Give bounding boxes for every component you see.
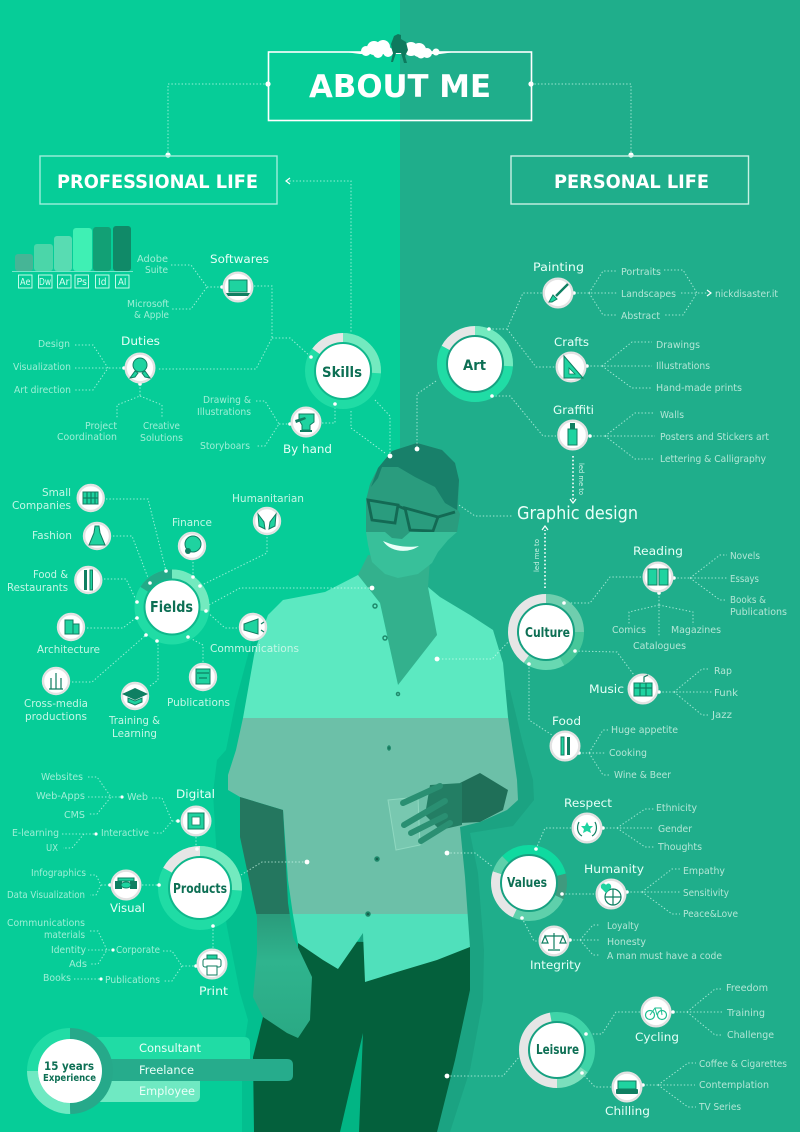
panel: skills: Art direction [14, 385, 71, 396]
shirt [228, 575, 518, 982]
panel: culture [513, 544, 787, 781]
bar chart: software skills: Ps [76, 277, 87, 288]
panel: products: materials [44, 930, 85, 941]
icon: training [122, 683, 148, 709]
panel: fields [7, 485, 304, 740]
panel: culture: Jazz [711, 710, 732, 721]
icon: architecture [58, 614, 84, 640]
panel: fields: Companies [12, 499, 71, 512]
panel: culture: Music [589, 682, 624, 696]
panel: fields: Training & [108, 714, 160, 727]
ring: skills [310, 338, 376, 404]
panel: products: E-learning [12, 828, 59, 839]
heading: personal life [511, 156, 748, 204]
panel: art: Drawings [656, 340, 700, 351]
panel: art: Illustrations [656, 361, 710, 372]
bar: employee: Employee [139, 1084, 195, 1098]
panel: values: Sensitivity [683, 888, 729, 899]
panel: skills: Visualization [13, 362, 71, 373]
panel: products [7, 772, 236, 998]
ring: art [442, 331, 508, 397]
panel: art: Painting [533, 260, 584, 274]
panel: culture: Rap [714, 666, 732, 677]
panel: culture: Books & [730, 595, 766, 606]
panel: art: Art [463, 358, 486, 374]
icon: publications [190, 664, 216, 690]
panel: skills: Illustrations [197, 407, 251, 418]
panel: products: Communications [7, 918, 85, 929]
panel: products: Products [173, 882, 227, 897]
panel: skills: Solutions [140, 433, 183, 444]
bar chart: software skills [12, 226, 133, 288]
icon: softwares [224, 273, 252, 301]
bar chart: software skills: Ae [20, 277, 31, 288]
face upper band [366, 443, 460, 532]
right forearm [460, 773, 508, 823]
panel: culture: Culture [525, 626, 570, 641]
icon: food [551, 732, 579, 760]
panel: products: Infographics [31, 868, 86, 879]
panel: art: Posters and Stickers art [660, 432, 769, 443]
panel: experience: 15 years [44, 1059, 94, 1073]
label: led me to, lower: led me to [533, 539, 541, 572]
title: ABOUT ME [309, 69, 491, 105]
ring: fields [140, 574, 204, 640]
panel: culture: Huge appetite [611, 725, 678, 736]
panel: art: Portraits [621, 267, 661, 278]
background right panel [400, 0, 800, 1132]
panel: skills: Project [85, 421, 117, 432]
panel: values: Honesty [607, 937, 646, 948]
panel: values: Humanity [584, 862, 644, 876]
trousers [253, 940, 470, 1132]
panel: products: Data Visualization [7, 890, 85, 901]
panel: skills: & Apple [134, 310, 169, 321]
panel: skills: Storyboars [200, 441, 250, 452]
panel: products: Ads [69, 959, 87, 970]
panel: leisure: Challenge [727, 1030, 774, 1041]
panel: culture: Essays [730, 574, 759, 585]
panel: products: Print [199, 984, 228, 998]
panel: culture: Cooking [609, 748, 647, 759]
icon: cycling [642, 998, 670, 1026]
bar chart: software skills: Id [98, 277, 106, 288]
hair [371, 443, 459, 510]
panel: fields: Humanitarian [232, 492, 304, 505]
smile [383, 541, 419, 551]
panel: values: Peace&Love [683, 909, 738, 920]
neck and chest [358, 555, 437, 685]
panel: culture: Wine & Beer [614, 770, 671, 781]
panel: fields: Learning [112, 727, 157, 740]
panel: culture: Catalogues [633, 641, 686, 652]
panel: skills: Skills [322, 365, 362, 381]
panel: skills: Drawing & [203, 395, 251, 406]
panel: culture: Reading [633, 544, 683, 558]
bar chart: software skills: AI [118, 277, 126, 288]
panel: art: Landscapes [621, 289, 676, 300]
panel: culture: Funk [714, 688, 738, 699]
icon: painting [544, 279, 572, 307]
heading: personal life: PERSONAL LIFE [554, 172, 709, 193]
panel: products: Websites [41, 772, 83, 783]
icon: duties [126, 354, 154, 382]
panel: values: Integrity [530, 958, 581, 972]
panel: skills: Design [38, 339, 70, 350]
icon: fashion [84, 523, 110, 549]
panel: values: Ethnicity [656, 803, 697, 814]
bar: employee [90, 1081, 200, 1102]
panel: skills [13, 252, 376, 456]
left arm [240, 797, 312, 1038]
ring: leisure [524, 1017, 590, 1083]
panel: leisure: Cycling [635, 1030, 679, 1044]
bar: freelance [90, 1059, 293, 1081]
panel: leisure: Leisure [536, 1043, 579, 1058]
illustration: man on cloud [345, 34, 455, 63]
panel: fields: Fashion [32, 529, 72, 542]
panel: skills: Coordination [57, 432, 117, 443]
nose shadow [385, 532, 410, 539]
panel: fields: Restaurants [7, 581, 68, 594]
panel: art: Walls [660, 410, 684, 421]
panel: culture: Food [552, 714, 581, 728]
icon: integrity [540, 927, 568, 955]
panel: products: Digital [176, 787, 215, 801]
panel: skills: Microsoft [127, 299, 169, 310]
icon: cross-media [43, 668, 69, 694]
bar: consultant: Consultant [139, 1041, 201, 1055]
icon: digital [182, 807, 210, 835]
icon: food [75, 567, 101, 593]
panel: culture: Publications [730, 607, 787, 618]
panel: leisure: Freedom [726, 983, 768, 994]
panel: fields: Fields [150, 598, 193, 616]
panel: art [442, 260, 778, 465]
panel: culture: Comics [612, 625, 646, 636]
gap between legs [340, 1033, 363, 1132]
panel: values: Respect [564, 796, 612, 810]
bar chart: software skills: Ar [59, 277, 70, 288]
icon: music [629, 675, 657, 703]
panel: experience: Experience [43, 1073, 96, 1084]
ring: products [164, 852, 236, 924]
icon: small companies [78, 485, 104, 511]
bar: freelance: Freelance [139, 1063, 194, 1077]
connector lines [62, 84, 727, 1107]
lower face [366, 532, 457, 578]
panel: products: UX [46, 843, 58, 854]
icon: by hand [292, 408, 320, 436]
panel: values: Gender [658, 824, 692, 835]
panel: fields: Small [42, 486, 71, 499]
panel: fields: productions [25, 710, 87, 723]
panel: fields: Food & [33, 568, 68, 581]
panel: art: Lettering & Calligraphy [660, 454, 766, 465]
panel: leisure: Training [726, 1008, 765, 1019]
panel: products: Web [127, 792, 148, 803]
panel: leisure: Chilling [605, 1104, 650, 1118]
panel: fields: Architecture [37, 643, 100, 656]
panel: products: Corporate [116, 945, 160, 956]
panel: skills: Duties [121, 334, 160, 348]
icon: humanity [597, 880, 625, 908]
icon: chilling [613, 1073, 641, 1101]
panel: art: nickdisaster.it [715, 289, 778, 300]
panel: products: Books [43, 973, 71, 984]
right hand [403, 783, 462, 841]
icon: print [198, 950, 226, 978]
panel: culture: Magazines [671, 625, 721, 636]
icon: reading [644, 563, 672, 591]
panel: products: Interactive [101, 828, 149, 839]
icon: visual [112, 871, 140, 899]
ring: values [496, 850, 562, 916]
connector dots [94, 81, 676, 1087]
icon: communications [240, 614, 266, 640]
panel: values: Empathy [683, 866, 725, 877]
bar chart: software skills: Dw [39, 277, 51, 288]
person silhouette shadow right [360, 690, 534, 1132]
panel: values: Thoughts [657, 842, 702, 853]
panel: culture: Novels [730, 551, 760, 562]
portrait of the man [228, 443, 518, 1132]
panel: fields: Cross-media [24, 697, 88, 710]
panel: values: Values [507, 876, 547, 891]
shirt buttons [366, 604, 400, 916]
panel: art: Abstract [621, 311, 660, 322]
glasses [368, 500, 455, 531]
icon: humanitarian [254, 508, 280, 534]
panel: experience [32, 1034, 293, 1108]
ring: culture [513, 599, 579, 665]
man silhouette [391, 34, 408, 63]
panel: fields: Publications [167, 696, 230, 709]
panel: products: Web-Apps [36, 791, 85, 802]
background left panel [0, 0, 400, 1132]
panel: products: CMS [64, 810, 85, 821]
panel: leisure [524, 983, 787, 1118]
icon: graffiti [558, 421, 587, 449]
panel: art: Hand-made prints [656, 383, 742, 394]
cloud [345, 40, 455, 58]
ring: 15 years [32, 1034, 108, 1108]
panel: leisure: Contemplation [699, 1080, 769, 1091]
panel: skills: Suite [145, 265, 168, 276]
label: led me to, upper: led me to [577, 463, 585, 495]
icon: crafts [557, 353, 585, 381]
panel: values: Loyalty [607, 921, 639, 932]
bar: consultant [90, 1037, 250, 1059]
panel: skills: Adobe [137, 254, 168, 265]
panel: products: Publications [105, 975, 160, 986]
panel: leisure: TV Series [698, 1102, 741, 1113]
panel: values [496, 796, 738, 972]
panel: skills: Creative [143, 421, 180, 432]
panel: art: Crafts [554, 335, 589, 349]
panel: leisure: Coffee & Cigarettes [699, 1059, 787, 1070]
panel: skills: By hand [283, 442, 332, 456]
label: graphic design: Graphic design [517, 504, 638, 524]
glass [388, 797, 420, 850]
panel: art: Graffiti [553, 403, 594, 417]
icon: respect [573, 814, 601, 842]
heading: professional life: PROFESSIONAL LIFE [57, 172, 258, 193]
panel: fields: Finance [172, 516, 212, 529]
panel: products: Identity [51, 945, 86, 956]
panel: products: Visual [110, 901, 145, 915]
title box: about me [268, 52, 532, 120]
heading: professional life [40, 156, 277, 204]
panel: fields: Communications [210, 642, 299, 655]
icon: finance [179, 533, 205, 559]
panel: values: A man must have a code [607, 951, 722, 962]
person silhouette shadow left [213, 640, 360, 1132]
panel: skills: Softwares [210, 252, 269, 266]
